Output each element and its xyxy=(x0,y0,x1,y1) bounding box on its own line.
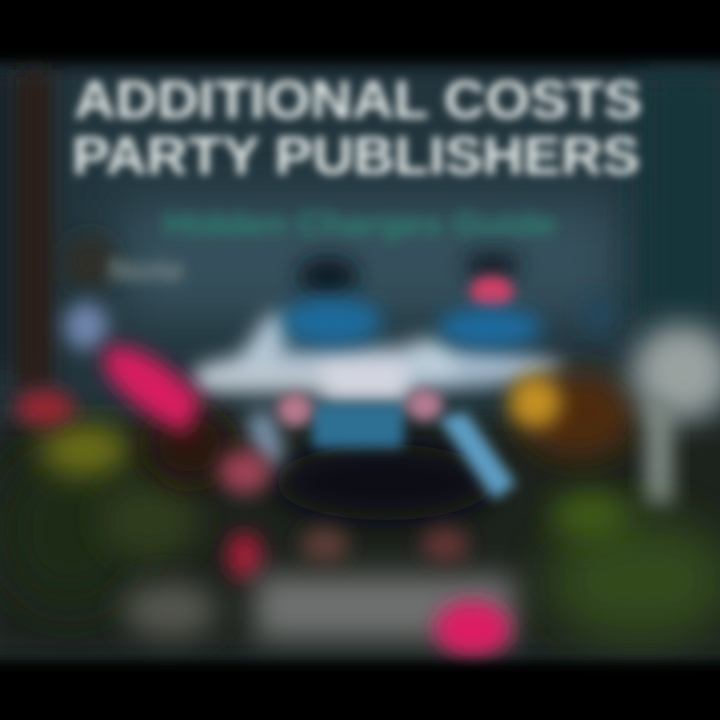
figure left xyxy=(282,257,382,346)
title: ADDITIONAL COSTS xyxy=(74,70,642,130)
tree trunk xyxy=(16,70,116,390)
plants right xyxy=(509,324,720,642)
bottom band xyxy=(0,664,720,720)
floor xyxy=(255,527,515,657)
title xyxy=(72,70,642,186)
small label: Note xyxy=(108,252,184,288)
figure right xyxy=(438,251,614,348)
plants left xyxy=(0,347,271,638)
central screen xyxy=(244,389,516,520)
illustration: two figures at a table xyxy=(64,251,614,520)
left light glow xyxy=(64,302,108,350)
title: PARTY PUBLISHERS xyxy=(72,126,640,186)
table and arms xyxy=(195,312,565,404)
subtitle: Hidden Charges Guide xyxy=(164,206,556,242)
